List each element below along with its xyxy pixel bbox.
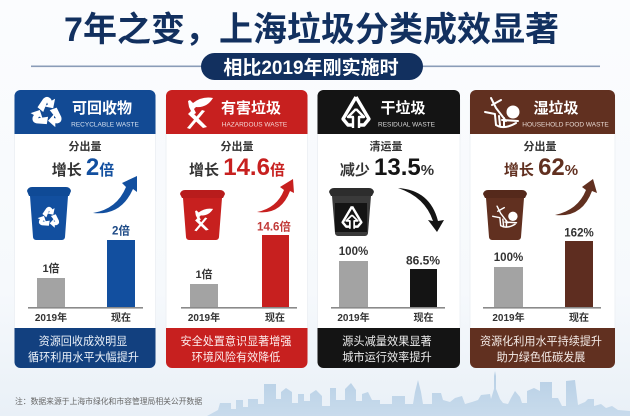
footer band: 助力绿色低碳发展 xyxy=(497,350,585,364)
footer band: 循环利用水平大幅提升 xyxy=(28,350,139,364)
header band xyxy=(166,90,308,134)
arrow: up xyxy=(257,179,294,212)
panel: residual waste xyxy=(318,90,460,368)
bar chart: 2倍 xyxy=(112,224,130,238)
bar chart: 2019年 xyxy=(35,311,67,324)
bar chart: 14.6倍 xyxy=(257,220,291,234)
city skyline xyxy=(207,371,630,416)
icon: black bin xyxy=(329,188,374,236)
panel: hazardous waste xyxy=(166,90,308,368)
footer band xyxy=(470,328,615,368)
bar chart: 1倍 xyxy=(195,267,213,281)
heading english: HOUSEHOLD FOOD WASTE xyxy=(522,122,609,128)
bar chart: 100% xyxy=(339,246,368,258)
bar chart xyxy=(28,224,143,324)
icon: hazard xyxy=(187,98,213,129)
panel: recyclable waste xyxy=(14,90,156,368)
bar chart: 100% xyxy=(494,252,523,264)
footer band: 安全处置意识显著增强 xyxy=(181,334,291,348)
arrow: down xyxy=(398,188,444,232)
card body xyxy=(166,100,308,355)
bar chart: 现在 xyxy=(265,311,285,324)
heading: 干垃圾 xyxy=(380,99,426,117)
icon: recycle xyxy=(29,97,66,129)
footer band: 环境风险有效降低 xyxy=(192,350,280,364)
metric label: 分出量 xyxy=(524,139,556,153)
bar chart: 86.5% xyxy=(406,254,440,268)
icon: blue bin xyxy=(27,187,71,240)
footer band: 资源回收成效明显 xyxy=(39,334,127,348)
metric value: 减少 13.5% xyxy=(340,154,434,181)
footer band xyxy=(14,328,156,368)
footer band xyxy=(166,328,308,368)
bar chart: 2019年 xyxy=(492,311,525,324)
metric value: 增长 2倍 xyxy=(52,154,114,181)
icon: residual xyxy=(343,97,369,128)
heading english: RESIDUAL WASTE xyxy=(378,122,436,128)
bar chart: 现在 xyxy=(414,311,434,324)
metric value: 增长 14.6倍 xyxy=(189,154,285,181)
heading: 湿垃圾 xyxy=(533,99,579,117)
footer band xyxy=(318,328,460,368)
metric label: 分出量 xyxy=(220,139,254,153)
bar chart xyxy=(483,228,601,324)
heading: 可回收物 xyxy=(72,99,132,117)
title: 7年之变，上海垃圾分类成效显著 xyxy=(64,11,559,49)
bar chart xyxy=(181,220,297,324)
icon: brown bin xyxy=(483,190,527,240)
bar chart: 162% xyxy=(564,228,594,240)
header band xyxy=(318,90,460,134)
footer band: 资源化利用水平持续提升 xyxy=(480,334,602,348)
bar chart xyxy=(331,246,445,324)
heading: 有害垃圾 xyxy=(221,99,281,117)
bar chart: 现在 xyxy=(569,311,589,324)
footer band: 城市运行效率提升 xyxy=(342,350,432,364)
panel: household food waste xyxy=(470,90,615,368)
footer band: 源头减量效果显著 xyxy=(342,334,432,348)
metric label: 清运量 xyxy=(370,139,402,153)
heading english: HAZARDOUS WASTE xyxy=(222,122,288,128)
icon: red bin xyxy=(180,190,225,240)
bar chart: 1倍 xyxy=(42,261,60,275)
bar chart: 2019年 xyxy=(337,311,370,324)
source note: 注：数据来源于上海市绿化和市容管理局相关公开数据 xyxy=(15,396,202,406)
card body xyxy=(470,100,615,355)
icon: food xyxy=(485,98,520,127)
metric value: 增长 62% xyxy=(504,154,578,181)
arrow: up xyxy=(555,179,597,215)
heading english: RECYCLABLE WASTE xyxy=(71,122,139,128)
header band xyxy=(14,90,156,134)
arrow: up xyxy=(93,176,137,213)
bar chart: 现在 xyxy=(111,311,131,324)
card body xyxy=(14,100,156,355)
header band xyxy=(470,90,615,134)
subtitle ribbon: 相比2019年刚实施时 xyxy=(223,56,399,79)
bar chart: 2019年 xyxy=(188,311,220,324)
metric label: 分出量 xyxy=(68,139,102,153)
subtitle ribbon xyxy=(31,53,600,80)
card body xyxy=(318,100,460,355)
